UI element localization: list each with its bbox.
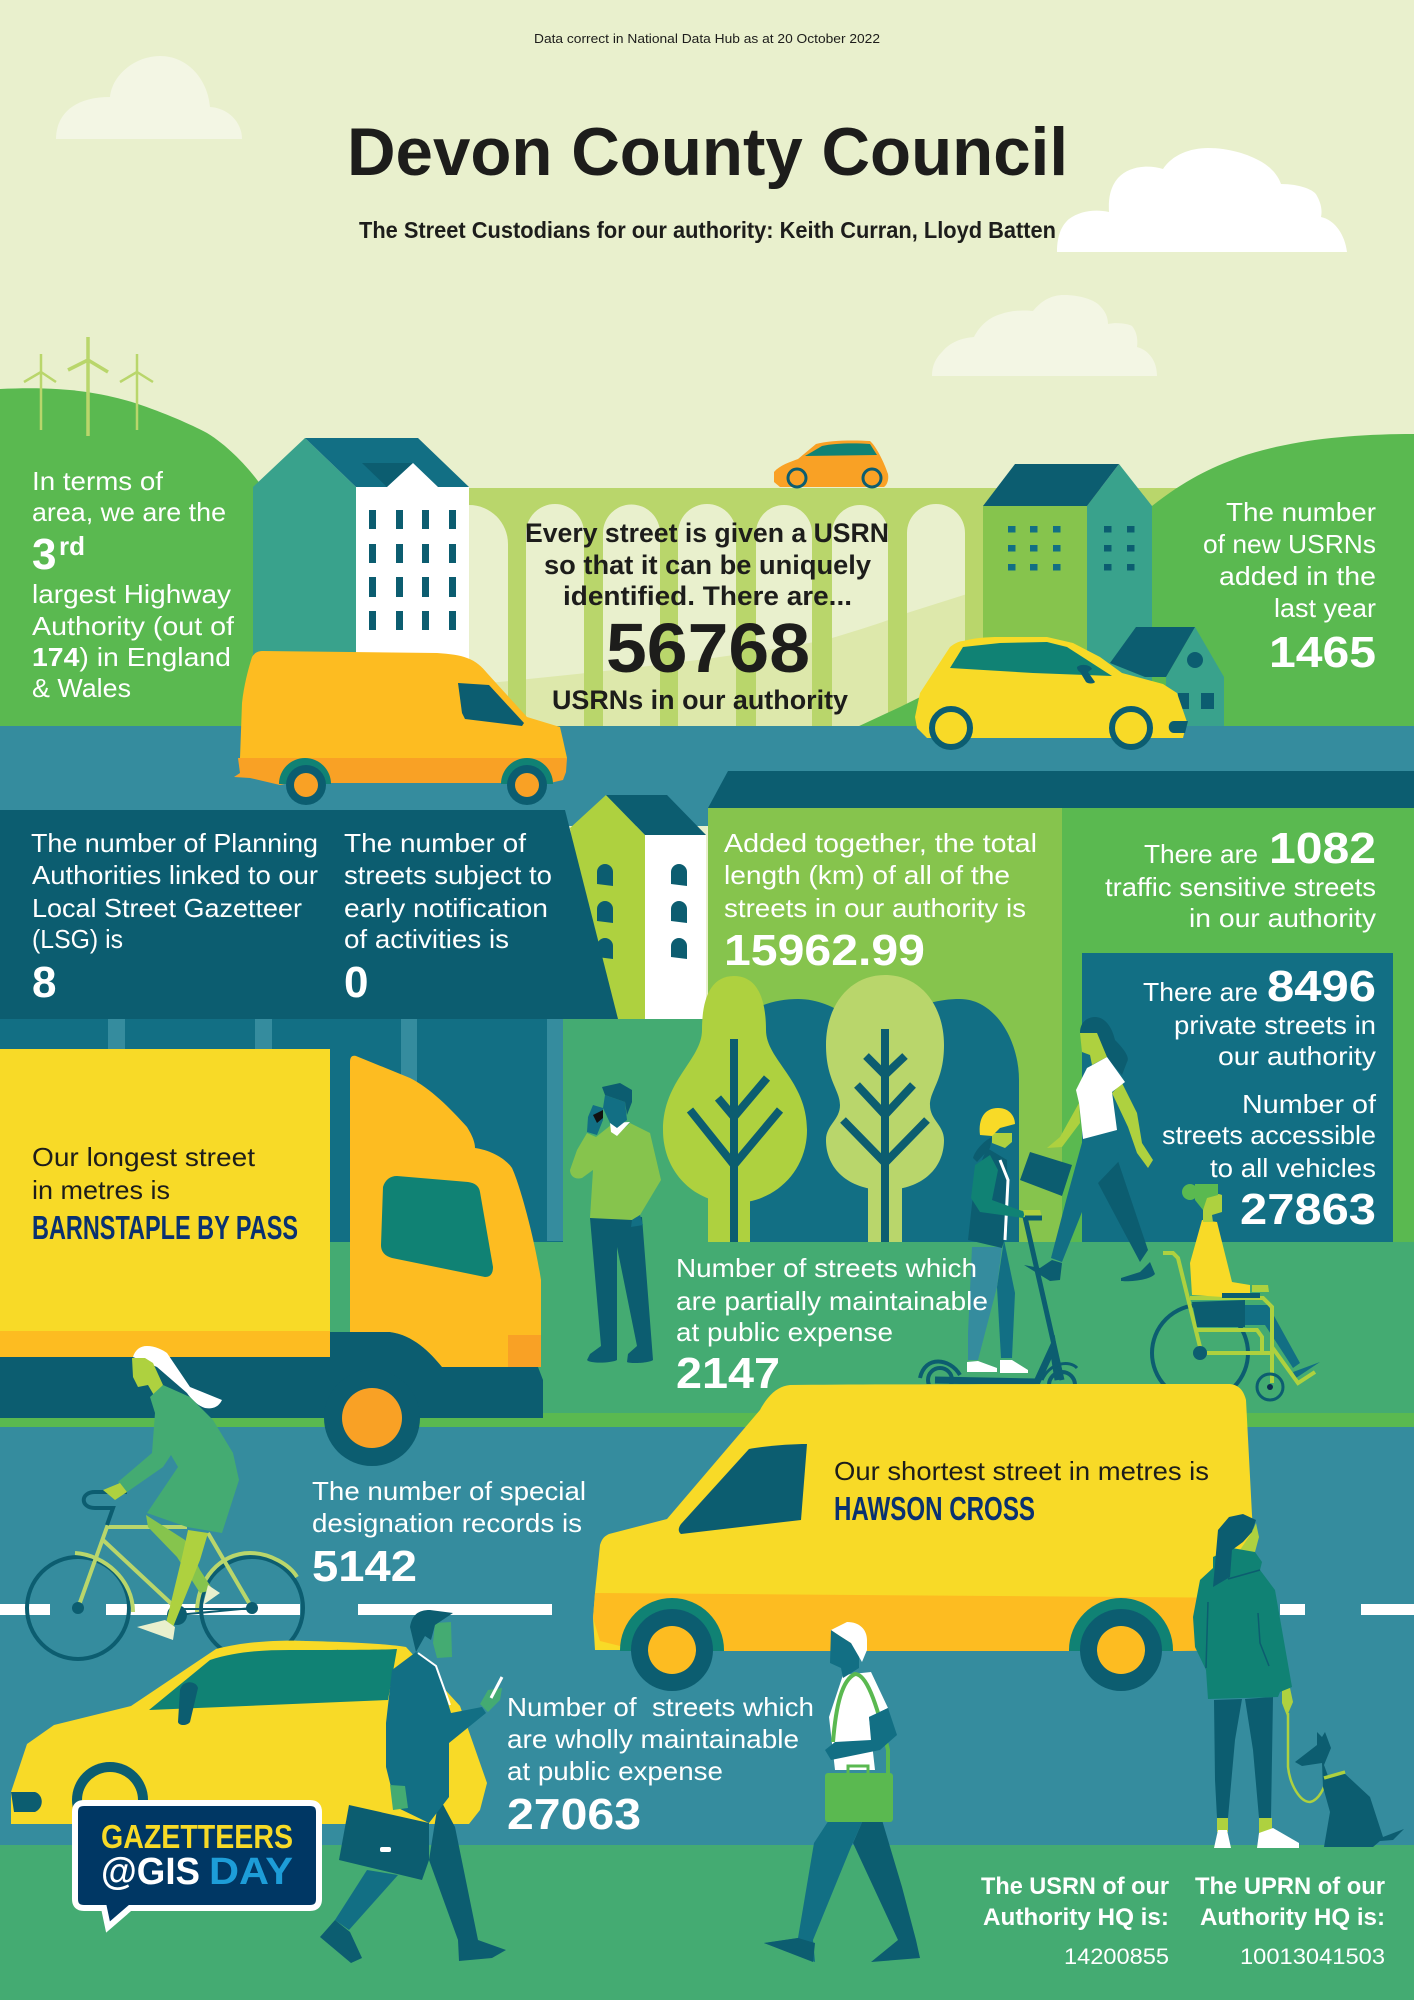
text: area rank: rd — [59, 531, 85, 561]
panel: private streets — [1082, 953, 1393, 1242]
text: new USRNs: added in the — [1219, 561, 1376, 591]
text: USRN of HQ: 14200855 — [1064, 1944, 1169, 1969]
text: partially maintainable: Number of streets which — [676, 1253, 977, 1283]
text: area rank: area, we are the — [32, 497, 226, 527]
text: special designation: designation records is — [312, 1508, 582, 1538]
text: USRN headline: Every street is given a USRN — [525, 518, 889, 548]
panel: planning authorities and early notification: The number of Planning — [31, 828, 318, 858]
traffic sensitive text: traffic sensitive streets — [1105, 872, 1376, 902]
total length text: 15962.99 — [724, 926, 925, 975]
shortest street text: HAWSON CROSS — [834, 1490, 1035, 1527]
panel: planning authorities and early notification: (LSG) is — [32, 924, 123, 954]
subtitle: street custodians: The Street Custodians for our authority: Keith Curran, Lloyd Batten — [359, 217, 1056, 243]
accessible streets text: to all vehicles — [1210, 1153, 1376, 1183]
icon: yellow car lower — [11, 1641, 487, 1838]
icon: big truck — [0, 1049, 543, 1466]
person: girl on scooter — [920, 1108, 1077, 1398]
text: area rank: 3 — [32, 530, 56, 579]
longest street text: in metres is — [32, 1175, 170, 1205]
panel: planning authorities and early notification: early notification — [344, 893, 548, 923]
right hill — [1152, 434, 1414, 727]
text: USRN headline: 56768 — [606, 609, 810, 687]
lower ground — [0, 1242, 1414, 1414]
logo: Gazetteers at GIS Day: DAY — [209, 1851, 293, 1893]
icon: cloud white — [1057, 148, 1347, 252]
total length text — [724, 828, 1037, 975]
accessible streets text: streets accessible — [1162, 1120, 1376, 1150]
total length text: Added together, the total — [724, 828, 1037, 858]
small lime house — [570, 795, 706, 1019]
title: Devon County Council — [347, 114, 1068, 190]
private streets text: our authority — [1218, 1041, 1376, 1071]
bottom ground — [0, 1845, 1414, 2000]
text: new USRNs: 1465 — [1269, 628, 1376, 677]
panel: planning authorities and early notification: 0 — [344, 958, 368, 1007]
text: partially maintainable: 2147 — [676, 1349, 780, 1398]
text: new USRNs: last year — [1274, 593, 1376, 623]
total length text: streets in our authority is — [724, 893, 1026, 923]
lane markings — [0, 1604, 1414, 1615]
building: tall teal — [253, 438, 469, 727]
longest street text: BARNSTAPLE BY PASS — [32, 1209, 298, 1246]
text: area rank: largest Highway — [32, 579, 231, 609]
text: new USRNs: The number — [1226, 497, 1376, 527]
panel: total length — [708, 808, 1062, 1242]
text: area rank: Authority (out of — [32, 611, 235, 641]
icon: tree lime — [663, 976, 807, 1242]
icon: orange van upper — [234, 651, 567, 805]
private streets text: private streets in — [1174, 1010, 1376, 1040]
panel: planning authorities and early notification: 8 — [32, 958, 56, 1007]
panel: planning authorities and early notification: The number of — [344, 828, 527, 858]
building: green right — [983, 464, 1152, 727]
text: special designation: The number of special — [312, 1476, 586, 1506]
ground left of trees — [563, 1019, 708, 1242]
person: businessman — [320, 1610, 506, 1963]
text: USRN headline: USRNs in our authority — [552, 685, 848, 715]
longest street text — [32, 1142, 298, 1246]
private streets text: There are — [1143, 977, 1258, 1007]
text: wholly maintainable — [507, 1692, 814, 1839]
viaduct arches — [469, 500, 970, 726]
logo: Gazetteers at GIS Day: GAZETTEERS — [101, 1818, 293, 1855]
panel: planning authorities and early notification — [0, 810, 618, 1019]
text: UPRN of HQ: The UPRN of our — [1195, 1873, 1385, 1900]
building: small house — [1110, 627, 1224, 727]
text: wholly maintainable: Number of streets which — [507, 1692, 814, 1722]
text: area rank: & Wales — [32, 673, 131, 703]
icon: cloud left — [56, 56, 242, 139]
data note: Data correct in National Data Hub as at 20 October 2022 — [534, 31, 880, 46]
text: USRN of HQ: The USRN of our — [981, 1873, 1169, 1900]
accessible streets text: Number of — [1242, 1089, 1377, 1119]
panel: traffic sensitive background — [1062, 808, 1414, 1242]
icon: tree pale — [826, 975, 944, 1242]
text: area rank: 174) in England — [32, 642, 231, 672]
accessible streets text — [1162, 1089, 1377, 1234]
hill slope beside viaduct — [857, 665, 985, 727]
panel: planning authorities and early notification: streets subject to — [344, 860, 552, 890]
person: woman with dog — [1193, 1514, 1345, 1848]
person: cyclist — [27, 1346, 303, 1659]
text: partially maintainable: at public expense — [676, 1317, 893, 1347]
wall pillars — [108, 1019, 563, 1241]
panel: planning authorities and early notification: Local Street Gazetteer — [32, 893, 302, 923]
person: walker with green bag — [764, 1622, 920, 1962]
text: UPRN of HQ: 10013041503 — [1240, 1944, 1385, 1969]
text: USRN of HQ — [981, 1873, 1169, 1969]
back bushes — [720, 999, 1019, 1242]
shortest street text: Our shortest street in metres is — [834, 1456, 1209, 1486]
shortest street text — [834, 1456, 1209, 1527]
text: special designation — [312, 1476, 586, 1591]
private streets text: 8496 — [1267, 962, 1376, 1011]
traffic sensitive text: There are — [1144, 839, 1258, 869]
road lower — [0, 1427, 1414, 1845]
text: USRN headline — [525, 518, 889, 715]
longest street text: Our longest street — [32, 1142, 256, 1172]
left hill — [0, 388, 280, 727]
text: partially maintainable — [676, 1253, 988, 1398]
text: wholly maintainable: are wholly maintainable — [507, 1724, 799, 1754]
viaduct — [469, 488, 1179, 726]
logo: Gazetteers at GIS Day — [75, 1803, 319, 1927]
traffic sensitive text: 1082 — [1269, 824, 1376, 873]
text: wholly maintainable: at public expense — [507, 1756, 723, 1786]
text: USRN headline: so that it can be uniquely — [544, 550, 871, 580]
dark road band right — [708, 771, 1414, 808]
text: area rank: In terms of — [32, 466, 164, 496]
logo: Gazetteers at GIS Day: @GIS — [101, 1851, 200, 1893]
text: partially maintainable: are partially maintainable — [676, 1286, 988, 1316]
text: USRN of HQ: Authority HQ is: — [983, 1904, 1169, 1931]
dark wall behind truck — [0, 1019, 563, 1242]
icon: orange car on viaduct — [774, 440, 888, 487]
panel: planning authorities and early notification: Authorities linked to our — [32, 860, 318, 890]
text: UPRN of HQ: Authority HQ is: — [1200, 1904, 1385, 1931]
text: wholly maintainable: 27063 — [507, 1790, 641, 1839]
icon: yellow van large — [593, 1384, 1262, 1703]
building windows — [369, 510, 456, 630]
person: woman walking with briefcase — [1020, 1017, 1155, 1281]
private streets text — [1143, 962, 1376, 1071]
text: new USRNs — [1203, 497, 1376, 677]
person: wheelchair user — [1152, 1184, 1320, 1401]
road upper — [0, 726, 1414, 826]
text: area rank — [32, 466, 235, 703]
icon: cloud right small — [932, 295, 1157, 376]
text: special designation: 5142 — [312, 1542, 417, 1591]
panel: planning authorities and early notification: of activities is — [344, 924, 509, 954]
traffic sensitive text: in our authority — [1189, 903, 1376, 933]
grass strip — [0, 1413, 1414, 1427]
text: UPRN of HQ — [1195, 1873, 1385, 1969]
traffic sensitive text — [1105, 824, 1376, 933]
icon: yellow car mid — [915, 637, 1188, 747]
person: man on phone — [570, 1083, 661, 1363]
text: new USRNs: of new USRNs — [1203, 529, 1376, 559]
accessible streets text: 27863 — [1240, 1185, 1376, 1234]
icon: dog — [1295, 1732, 1404, 1847]
text: USRN headline: identified. There are... — [563, 581, 852, 611]
total length text: length (km) of all of the — [724, 860, 1010, 890]
icon: wind turbines — [24, 337, 153, 436]
